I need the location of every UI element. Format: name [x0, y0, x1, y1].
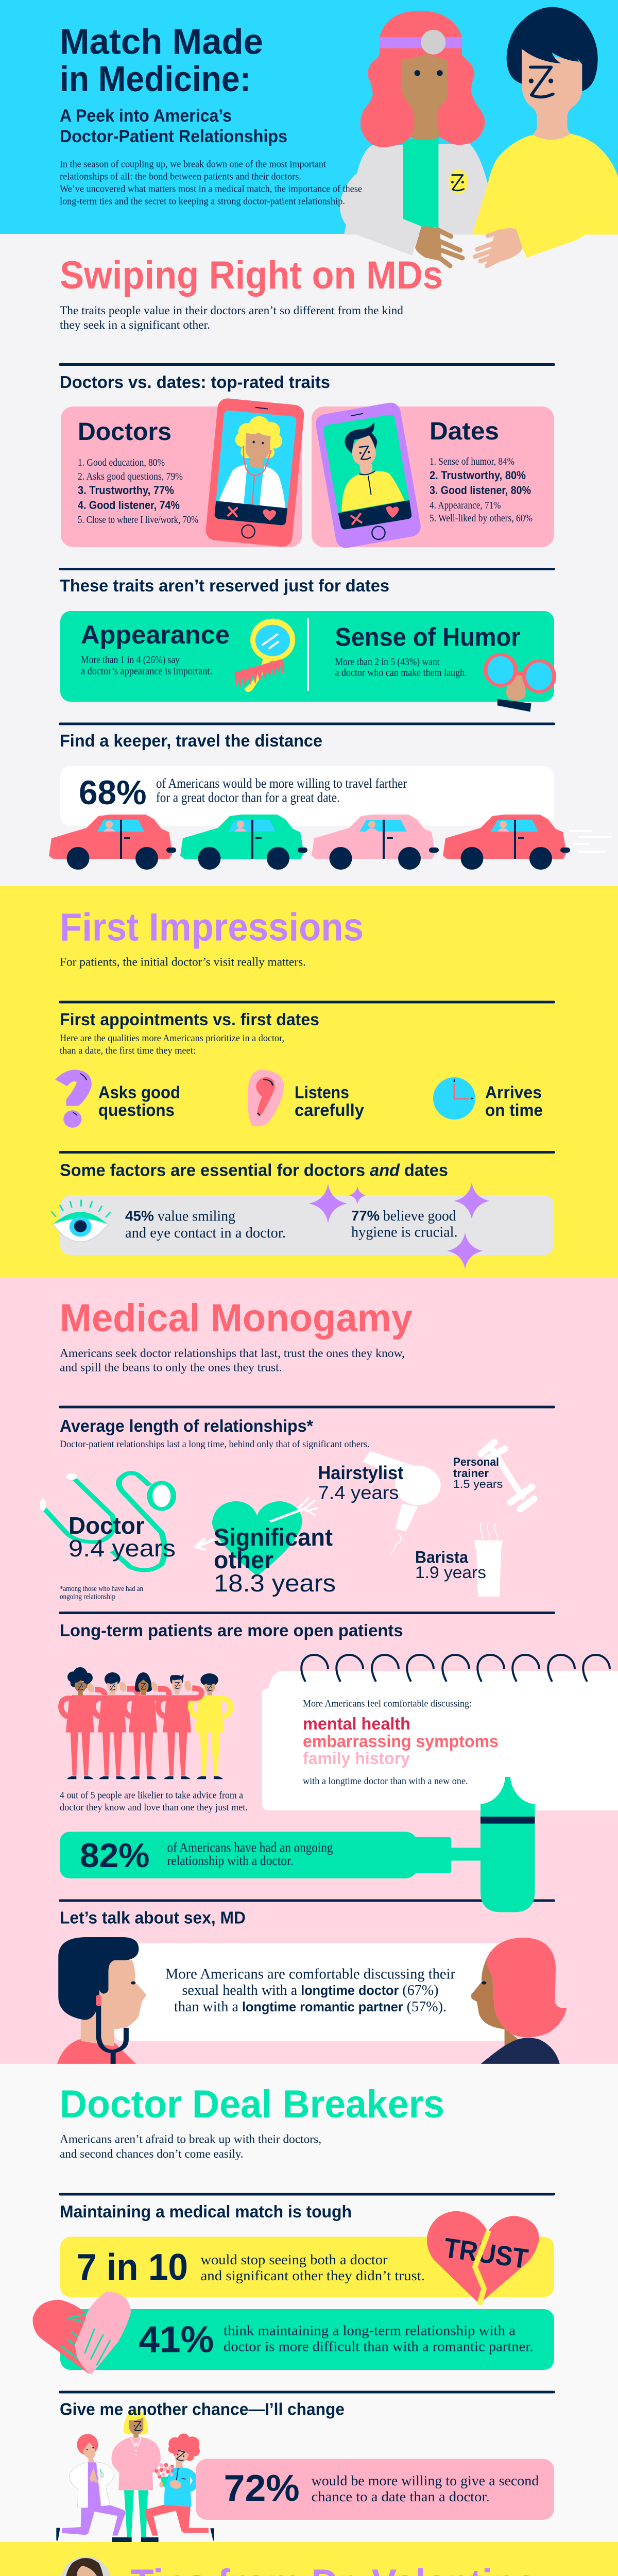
card text: sense of humor: a doctor who can make them laugh. — [335, 667, 467, 679]
label: doctor 9.4 years — [68, 1512, 176, 1562]
stat text — [201, 2252, 425, 2283]
icon: car 3 — [312, 815, 439, 870]
label: personal trainer 1.5 years: 1.5 years — [453, 1478, 503, 1490]
subheading: essential factors: Some factors are essential for doctors and dates — [60, 1161, 448, 1180]
heading: swiping right on MDs: Swiping Right on MDs — [60, 253, 443, 297]
subtitle — [60, 106, 287, 146]
notepad topics: family history — [303, 1749, 410, 1768]
icon: broken heart: TRUST — [442, 2232, 530, 2275]
caption: 4 out of 5: doctor they know and love than one they just met. — [60, 1802, 248, 1813]
label: listens carefully: carefully — [295, 1100, 365, 1120]
card text: sense of humor — [335, 656, 467, 679]
notepad topics — [303, 1714, 499, 1768]
heading: medical monogamy: Medical Monogamy — [60, 1296, 413, 1340]
card text: sense of humor: More than 2 in 5 (43%) want — [335, 656, 440, 668]
description: than a date, the first time they meet: — [60, 1045, 196, 1056]
subtitle: Doctor-Patient Relationships — [60, 127, 287, 146]
label: asks good questions: questions — [98, 1100, 175, 1120]
section: doctor deal breakers — [0, 2064, 618, 2542]
panel: doctors traits — [61, 398, 305, 548]
panel title: dates: Dates — [430, 418, 499, 445]
list: doctor traits: 4. Good listener, 74% — [78, 499, 180, 512]
label: barista 1.9 years — [415, 1548, 486, 1582]
subheading: doctors vs dates: Doctors vs. dates: top-rated traits — [60, 372, 330, 392]
comparison text — [165, 1966, 455, 2015]
list: doctor traits: 2. Asks good questions, 79% — [78, 471, 183, 482]
panel: travel stat — [49, 766, 612, 870]
intro text: Americans aren’t afraid to break up with their doctors, — [60, 2133, 321, 2146]
label: arrives on time: on time — [485, 1100, 543, 1120]
stat text — [156, 776, 407, 805]
label: barista 1.9 years: Barista — [415, 1548, 468, 1567]
footnote: ongoing relationship — [60, 1593, 115, 1601]
stat text — [312, 2473, 539, 2504]
icon: car 1 — [49, 815, 176, 870]
label: significant other 18.3 years: Significant — [214, 1523, 333, 1551]
subheading: average length: Average length of relationships* — [60, 1416, 313, 1435]
label: asks good questions — [98, 1083, 180, 1120]
icon: clock — [433, 1077, 475, 1120]
stat text: chance to a date than a doctor. — [312, 2489, 490, 2504]
intro text: and spill the beans to only the ones they trust. — [60, 1361, 282, 1374]
comparison text: than with a longtime romantic partner (57%). — [174, 1998, 447, 2015]
intro paragraph: We’ve uncovered what matters most in a medical match, the importance of these — [60, 183, 362, 195]
illustration: syringe stat — [60, 1777, 535, 1912]
panel: essential factors — [51, 1183, 554, 1269]
heading: first impressions: First Impressions — [60, 906, 364, 949]
list: date traits: 4. Appearance, 71% — [430, 500, 501, 511]
illustration: five people — [61, 1667, 231, 1779]
title — [60, 22, 263, 99]
subheading: maintaining a medical match: Maintaining a medical match is tough — [60, 2202, 352, 2221]
title: in Medicine: — [60, 59, 251, 99]
subheading: give me another chance: Give me another chance—I’ll change — [60, 2400, 345, 2419]
panel: dates traits — [312, 401, 554, 550]
stat text: think maintaining a long-term relationship with a — [224, 2323, 516, 2338]
label: asks good questions: Asks good — [98, 1083, 180, 1102]
label: significant other 18.3 years: 18.3 years — [214, 1569, 336, 1597]
icon: funny glasses — [486, 655, 554, 711]
stat: 41%: 41% — [139, 2319, 214, 2360]
stat text: doctor is more difficult than with a romantic partner. — [224, 2339, 534, 2354]
heading: doctor deal breakers: Doctor Deal Breakers — [60, 2082, 444, 2126]
label: significant other 18.3 years — [214, 1523, 336, 1597]
panel: notepad — [262, 1655, 618, 1810]
intro text — [60, 1347, 405, 1374]
icon: car 2 — [180, 815, 307, 870]
icon: broken heart — [427, 2211, 539, 2305]
panel: 7 in 10 — [60, 2211, 554, 2305]
card title: appearance: Appearance — [81, 620, 230, 649]
stat text: and significant other they didn’t trust. — [201, 2268, 425, 2283]
subtitle: A Peek into America’s — [60, 106, 232, 126]
icon: heart hands — [32, 2292, 131, 2374]
notepad topics: embarrassing symptoms — [303, 1732, 499, 1751]
stat: 7 in 10: 7 in 10 — [77, 2247, 188, 2288]
label: doctor 9.4 years: 9.4 years — [68, 1535, 176, 1562]
icon: sparkles — [308, 1183, 490, 1269]
icon: stethoscope — [40, 1473, 174, 1570]
label: arrives on time: Arrives — [485, 1083, 542, 1102]
illustration: doctor profile — [57, 1937, 147, 2064]
panel: 41% — [32, 2292, 554, 2374]
stat: 68%: 68% — [79, 773, 146, 811]
section: swiping right on MDs — [0, 234, 618, 886]
list: date traits: 3. Good listener, 80% — [430, 484, 531, 497]
label: listens carefully: Listens — [295, 1083, 349, 1102]
caption: 4 out of 5 — [60, 1790, 248, 1813]
comparison text: sexual health with a longtime doctor (67%) — [182, 1982, 439, 1998]
intro text: Americans seek doctor relationships that last, trust the ones they know, — [60, 1347, 405, 1360]
notepad closing: with a longtime doctor than with a new one. — [303, 1776, 468, 1787]
subheading: talk about sex: Let’s talk about sex, MD — [60, 1908, 246, 1927]
label: significant other 18.3 years: other — [214, 1546, 273, 1573]
subheading: long-term patients: Long-term patients are more open patients — [60, 1621, 403, 1640]
stat text — [167, 1840, 333, 1868]
icon: ear — [248, 1070, 284, 1126]
subheading: first appointments: First appointments vs. first dates — [60, 1010, 319, 1029]
stat: 45%: 45% value smiling — [125, 1208, 235, 1224]
icon: heart with arrow — [196, 1497, 318, 1576]
icon: dumbbell — [481, 1442, 534, 1509]
card text: appearance: More than 1 in 4 (26%) say — [81, 654, 180, 666]
label: hairstylist 7.4 years — [318, 1462, 404, 1503]
stat: 77%: hygiene is crucial. — [351, 1224, 458, 1241]
intro text — [60, 304, 403, 331]
stat text — [224, 2323, 534, 2354]
panel: sexual health comparison — [57, 1937, 567, 2064]
label: doctor 9.4 years: Doctor — [68, 1512, 145, 1539]
intro text: and second chances don’t come easily. — [60, 2147, 244, 2160]
panel: appearance and humor — [60, 611, 554, 711]
intro paragraph: relationships of all: the bond between patients and their doctors. — [60, 171, 301, 182]
label: hairstylist 7.4 years: Hairstylist — [318, 1462, 404, 1483]
stat text: of Americans would be more willing to travel farther — [156, 776, 407, 791]
stat text: would be more willing to give a second — [312, 2473, 539, 2488]
stat text: would stop seeing both a doctor — [201, 2252, 388, 2267]
intro text: The traits people value in their doctors aren’t so different from the kind — [60, 304, 403, 317]
stat text: of Americans have had an ongoing — [167, 1840, 333, 1855]
list: doctor traits: 5. Close to where I live/work, 70% — [78, 514, 198, 526]
description — [60, 1033, 284, 1056]
list: doctor traits: 3. Trustworthy, 77% — [78, 484, 174, 497]
photo: Dr. Valentine — [60, 2556, 111, 2576]
label: hairstylist 7.4 years: 7.4 years — [318, 1482, 399, 1503]
label: personal trainer 1.5 years: trainer — [453, 1467, 489, 1480]
stat: 82%: 82% — [80, 1836, 149, 1874]
list: doctor traits: 1. Good education, 80% — [78, 457, 165, 468]
subheading: traits: These traits aren’t reserved just for dates — [60, 576, 389, 595]
card title: sense of humor: Sense of Humor — [335, 622, 520, 651]
label: barista 1.9 years: 1.9 years — [415, 1563, 486, 1582]
label: listens carefully — [295, 1083, 365, 1120]
intro text: they seek in a significant other. — [60, 318, 210, 331]
illustration: patient profile — [471, 1938, 567, 2064]
panel: 72% — [196, 2459, 554, 2520]
card text: appearance — [81, 654, 212, 677]
notepad topics: mental health — [303, 1714, 410, 1733]
illustration: doctor and patient — [340, 7, 618, 266]
intro text — [60, 2133, 321, 2160]
stat text: relationship with a doctor. — [167, 1853, 294, 1868]
list: date traits: 5. Well-liked by others, 60% — [430, 513, 533, 524]
section: tips from Dr. Valentine — [0, 2542, 618, 2576]
icon: question mark — [55, 1070, 92, 1128]
section: header — [0, 0, 618, 266]
chart: relationship lengths — [40, 1442, 534, 1601]
stat: 77% — [351, 1208, 458, 1241]
icon: hair dryer — [363, 1451, 441, 1554]
list: date traits: 1. Sense of humor, 84% — [430, 456, 514, 467]
intro paragraph — [60, 159, 362, 207]
title: Match Made — [60, 22, 263, 62]
icon: doctor phone — [205, 398, 305, 548]
caption: 4 out of 5: 4 out of 5 people are likelier to take advice from a — [60, 1790, 244, 1801]
intro paragraph: long-term ties and the secret to keeping a strong doctor-patient relationship. — [60, 196, 345, 207]
section: first impressions — [0, 886, 618, 1277]
intro paragraph: In the season of coupling up, we break down one of the most important — [60, 159, 327, 170]
icon: car 4 — [443, 815, 570, 870]
footnote: *among those who have had an — [60, 1585, 143, 1593]
stat: 77%: 77% believe good — [351, 1208, 456, 1224]
list: date traits — [430, 456, 533, 524]
icon: mirror and comb — [234, 619, 295, 692]
illustration: kneeling people — [56, 2410, 214, 2542]
footnote — [60, 1585, 143, 1601]
stat: 45% — [125, 1208, 286, 1241]
comparison text: More Americans are comfortable discussing their — [165, 1966, 455, 1982]
label: personal trainer 1.5 years: Personal — [453, 1455, 499, 1468]
section: medical monogamy — [0, 1277, 618, 2064]
description: Here are the qualities more Americans prioritize in a doctor, — [60, 1033, 284, 1044]
subheading: find a keeper: Find a keeper, travel the distance — [60, 731, 322, 750]
icon: date phone — [314, 401, 422, 550]
panel title: doctors: Doctors — [78, 418, 171, 446]
description: Doctor-patient relationships last a long time, behind only that of significant others. — [60, 1439, 370, 1450]
label: arrives on time — [485, 1083, 543, 1120]
stat text: for a great doctor than for a great date. — [156, 790, 340, 805]
label: personal trainer 1.5 years — [453, 1455, 503, 1490]
list: doctor traits — [78, 457, 198, 526]
icon: coffee cup — [474, 1522, 503, 1597]
icon: eye — [51, 1200, 110, 1242]
notepad intro: More Americans feel comfortable discussing: — [303, 1698, 472, 1709]
card text: appearance: a doctor’s appearance is important. — [81, 666, 212, 677]
stat: 45%: and eye contact in a doctor. — [125, 1225, 286, 1241]
stat: 72%: 72% — [224, 2468, 300, 2509]
intro text: For patients, the initial doctor’s visit really matters. — [60, 955, 306, 969]
list: date traits: 2. Trustworthy, 80% — [430, 469, 526, 482]
